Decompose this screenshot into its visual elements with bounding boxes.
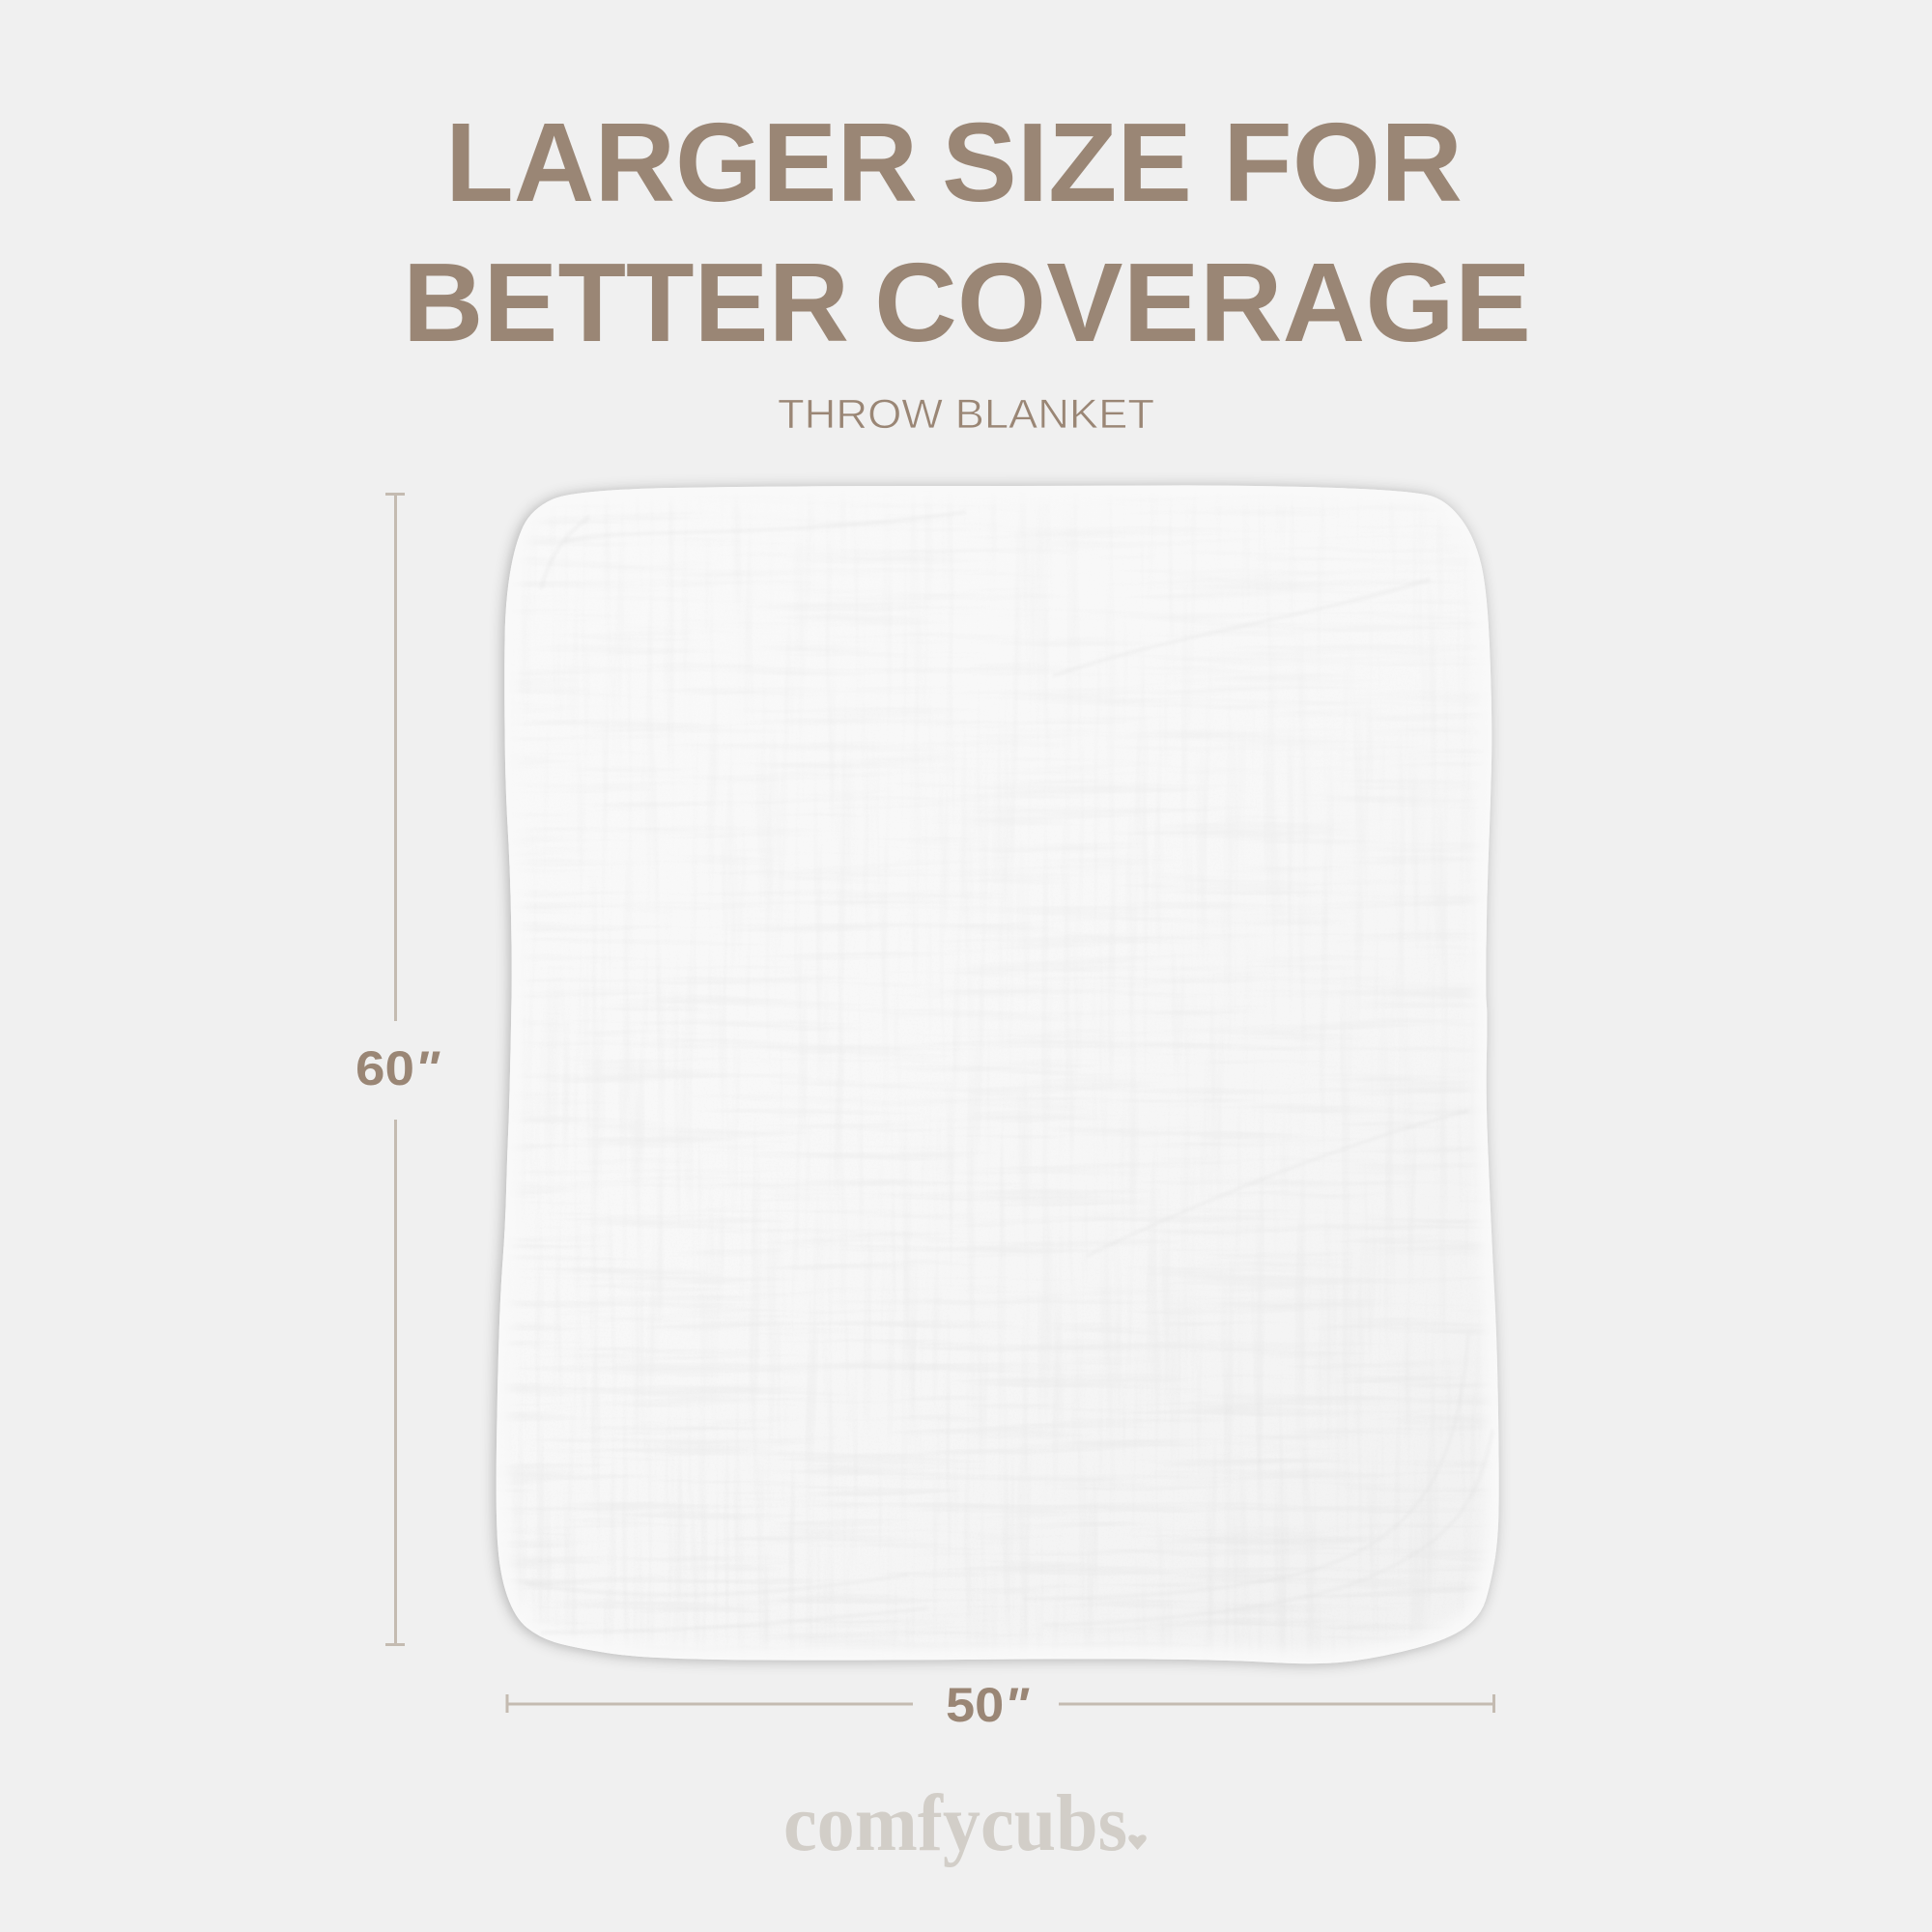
icon: heart (1128, 1834, 1147, 1850)
title: COVERAGE (874, 240, 1531, 365)
title (403, 99, 1531, 365)
height label: 60" (355, 1041, 440, 1095)
vertical dimension: 60 inches (355, 495, 440, 1644)
subtitle: throw blanket: THROW BLANKET (778, 391, 1154, 438)
width label: 50" (946, 1678, 1030, 1732)
title: BETTER (403, 240, 849, 365)
title: FOR (1223, 99, 1463, 225)
width bracket line (507, 1694, 1493, 1713)
brand logo: comfycubs (783, 1778, 1127, 1868)
title: SIZE (942, 99, 1192, 225)
height bracket line (385, 495, 405, 1644)
horizontal dimension: 50 inches (507, 1678, 1493, 1732)
title: LARGER (445, 99, 918, 225)
blanket photo illustration (483, 473, 1517, 1681)
